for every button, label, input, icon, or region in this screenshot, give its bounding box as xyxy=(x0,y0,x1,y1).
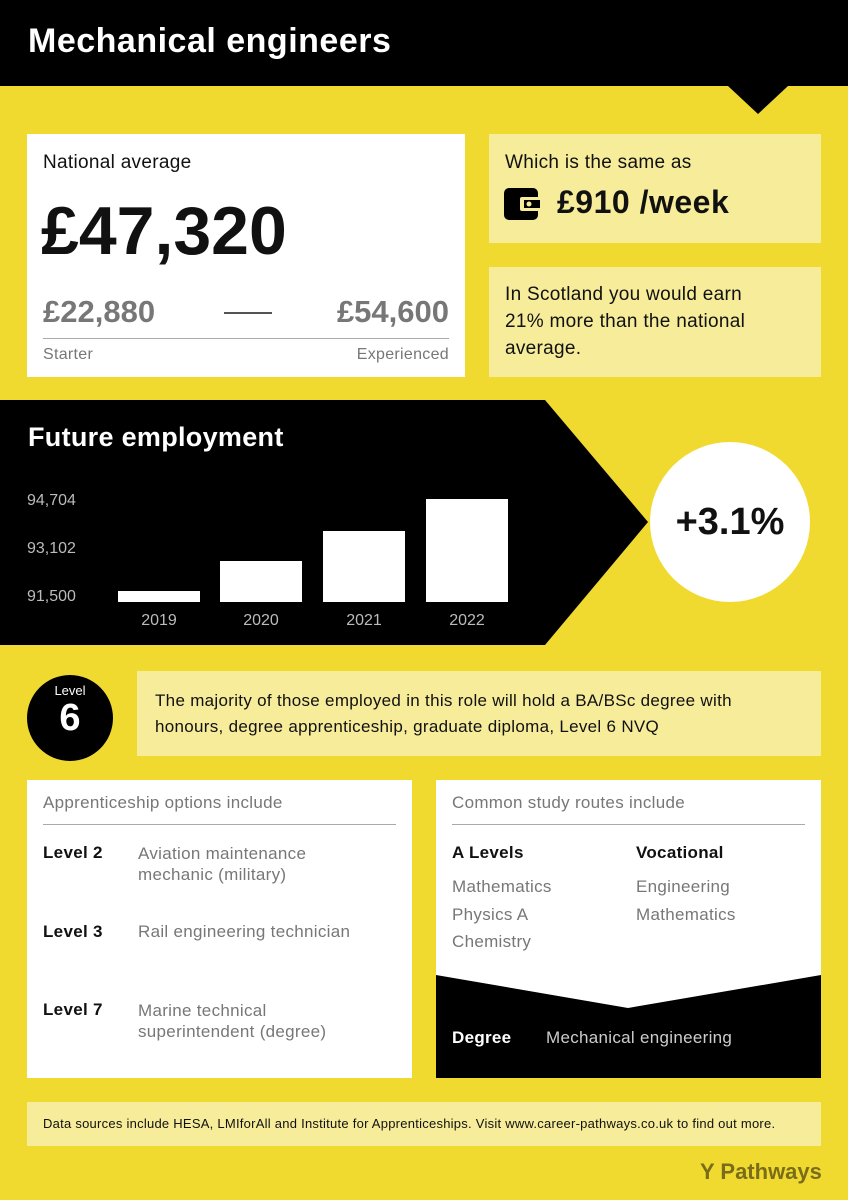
panel: apprenticeships: Marine technical xyxy=(138,1001,267,1020)
icon: level 6 xyxy=(27,675,113,761)
panel: weekly: Which is the same as xyxy=(505,152,692,173)
icon: wallet xyxy=(504,188,540,220)
panel: national average: National average xyxy=(43,152,191,173)
panel: scotland: In Scotland you would earn 21% more than the national average. xyxy=(505,284,745,359)
panel: scotland xyxy=(489,267,821,377)
panel: apprenticeships: Level 7 xyxy=(43,1000,103,1019)
bar chart: 2022 xyxy=(449,612,485,629)
panel: study routes: A Levels xyxy=(452,843,524,862)
icon: level 6: Level xyxy=(54,683,86,698)
panel: study routes: Physics A xyxy=(452,904,528,924)
panel: study routes: Mathematics xyxy=(452,877,552,896)
panel: study routes: Mathematics xyxy=(636,904,736,924)
callout: growth circle: +3.1% xyxy=(676,501,784,543)
panel: study routes: Common study routes include xyxy=(452,793,685,812)
footer note: Data sources include HESA, LMIforAll and Institute for Apprenticeships. Visit www.career-pathways.co.uk to find out more. xyxy=(43,1116,775,1131)
panel: apprenticeships: superintendent (degree) xyxy=(138,1022,326,1041)
panel: study routes: Vocational xyxy=(636,843,724,862)
bar chart: 94,704 xyxy=(27,492,76,509)
panel: future employment xyxy=(0,400,648,645)
panel: national average: Starter xyxy=(43,346,93,363)
text: qualifications xyxy=(137,671,821,756)
panel: apprenticeships: Level 3 xyxy=(43,922,103,941)
panel: apprenticeships: Level 2 xyxy=(43,843,103,862)
panel: weekly xyxy=(489,134,821,243)
panel: apprenticeships: Apprenticeship options include xyxy=(43,793,283,812)
panel: weekly: £910 /week xyxy=(557,184,729,220)
panel: study routes: Mechanical engineering xyxy=(546,1028,732,1047)
panel: study routes: Engineering xyxy=(636,877,730,896)
panel: apprenticeships: mechanic (military) xyxy=(138,865,286,884)
panel: national average: £47,320 xyxy=(41,193,287,269)
callout: growth circle xyxy=(650,442,810,602)
panel: national average xyxy=(27,134,465,377)
panel: study routes xyxy=(436,780,821,1078)
bar chart: 2019 xyxy=(141,612,177,629)
panel: apprenticeships xyxy=(27,780,412,1078)
panel: apprenticeships: Rail engineering technician xyxy=(138,922,350,941)
header xyxy=(0,0,848,114)
panel: study routes: Degree xyxy=(452,1028,511,1047)
panel: national average: £22,880 xyxy=(43,294,155,329)
panel: future employment: Future employment xyxy=(28,422,284,452)
logo: pathways: Y Pathways xyxy=(700,1159,822,1184)
bar chart: 2020 xyxy=(243,612,279,629)
text: qualifications: The majority of those employed in this role will hold a BA/BSc degree with honours, degree apprenticeship, graduate diploma, Level 6 NVQ xyxy=(155,691,732,736)
bar chart: 93,102 xyxy=(27,540,76,557)
bar chart: 2021 xyxy=(346,612,382,629)
bar chart: 91,500 xyxy=(27,588,76,605)
footer note xyxy=(27,1102,821,1146)
title: Mechanical engineers xyxy=(28,22,391,60)
panel: study routes: Chemistry xyxy=(452,932,531,951)
bar chart xyxy=(27,492,508,629)
panel: national average: Experienced xyxy=(357,346,449,363)
panel: national average: £54,600 xyxy=(337,294,449,329)
icon: level 6: 6 xyxy=(59,697,81,739)
panel: apprenticeships: Aviation maintenance xyxy=(138,844,306,863)
